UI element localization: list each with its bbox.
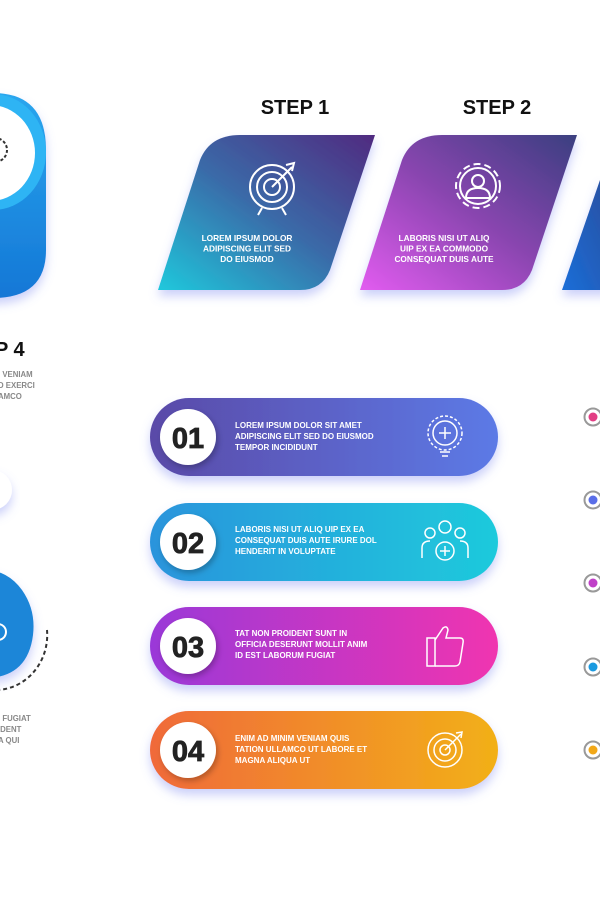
icon: dashed circle [0, 138, 7, 162]
panel: step 1: DO EIUSMOD [220, 254, 274, 264]
panel: step 2: CONSEQUAT DUIS AUTE [394, 254, 494, 264]
pill 04: MAGNA ALIQUA UT [235, 756, 310, 765]
icon: thumbs up [427, 627, 463, 666]
icon: group [422, 521, 468, 560]
panel: step 1: LOREM IPSUM DOLOR [202, 233, 292, 243]
pill 03: OFFICIA DESERUNT MOLLIT ANIM [235, 640, 368, 649]
panel: step 1 [158, 135, 375, 290]
pill 02: LABORIS NISI UT ALIQ UIP EX EA [235, 525, 365, 534]
pill 01: 01 [172, 423, 204, 455]
panel: step 2: LABORIS NISI UT ALIQ [399, 233, 490, 243]
pill 01: LOREM IPSUM DOLOR SIT AMET [235, 421, 362, 430]
pill 04 [150, 711, 498, 789]
pill 01 [150, 398, 498, 476]
panel: step 2 [360, 135, 577, 290]
teardrop with gear [0, 570, 47, 690]
bullet markers [584, 408, 600, 758]
left cylinder [0, 93, 46, 298]
panel: step 1: ADIPISCING ELIT SED [203, 244, 291, 254]
pill 02: HENDERIT IN VOLUPTATE [235, 547, 336, 556]
pill 03: ID EST LABORUM FUGIAT [235, 651, 335, 660]
pill 01: ADIPISCING ELIT SED DO EIUSMOD [235, 432, 374, 441]
pill 02 [150, 503, 498, 581]
pill 01: TEMPOR INCIDIDUNT [235, 443, 318, 452]
pill 03: TAT NON PROIDENT SUNT IN [235, 629, 347, 638]
pill 04: ENIM AD MINIM VENIAM QUIS [235, 734, 350, 743]
panel: step 3 partial [562, 180, 600, 290]
panel: step 2: UIP EX EA COMMODO [400, 244, 489, 254]
bottom left text [0, 714, 31, 745]
pill 04: 04 [172, 736, 204, 768]
icon: target [250, 163, 294, 215]
pill 03 [150, 607, 498, 685]
icon: gear person [456, 164, 500, 208]
step 2 heading: STEP 2 [463, 97, 531, 119]
pill 03: 03 [172, 632, 204, 664]
step 1 heading: STEP 1 [261, 97, 329, 119]
pill 02: CONSEQUAT DUIS AUTE IRURE DOL [235, 536, 377, 545]
pill 04: TATION ULLAMCO UT LABORE ET [235, 745, 367, 754]
icon: target [428, 732, 462, 767]
pill 02: 02 [172, 528, 204, 560]
icon: bulb [428, 416, 462, 456]
step 4 label [0, 339, 35, 401]
glow circle [0, 470, 12, 510]
